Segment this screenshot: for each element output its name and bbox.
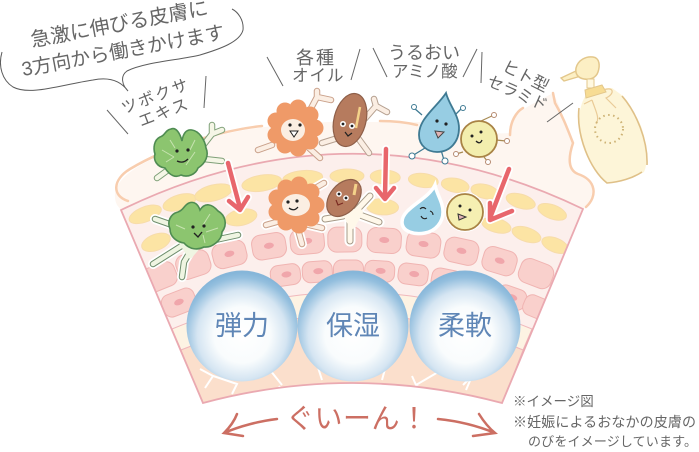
circle: 弾力 xyxy=(186,270,298,382)
upper yellow ceramide character xyxy=(454,112,510,164)
label: ヒト型セラミド xyxy=(484,57,573,122)
arrow: stretch left xyxy=(224,414,277,436)
upper blue amino acid character xyxy=(409,93,466,164)
footnotes: ※妊娠によるおなかの皮膚の xyxy=(513,414,696,430)
label: 各種オイル: 各種 xyxy=(296,48,336,68)
circle: 保湿: 保湿 xyxy=(326,311,380,341)
label: うるおいアミノ酸: うるおい xyxy=(388,43,460,63)
lower brown oil character xyxy=(320,173,379,241)
peach dermis xyxy=(181,315,523,405)
label: 各種オイル xyxy=(267,48,360,86)
red arrow right xyxy=(490,169,512,220)
pump bottle xyxy=(561,57,647,183)
stratum corneum and pump hump xyxy=(115,93,594,210)
pink cells upper row xyxy=(139,227,556,295)
yellow cells upper row xyxy=(127,169,569,227)
red arrow middle xyxy=(376,149,394,199)
circle: 柔軟 xyxy=(410,270,520,382)
dermis cell lines xyxy=(200,368,471,394)
circle: 柔軟: 柔軟 xyxy=(438,311,492,341)
yellow cells lower row xyxy=(139,198,571,257)
lower blue amino acid character xyxy=(402,185,443,234)
cream layer xyxy=(172,292,532,350)
label: ヒト型セラミド: セラミド xyxy=(484,73,550,115)
label: うるおいアミノ酸: アミノ酸 xyxy=(392,62,458,81)
label: ヒト型セラミド: ヒト型 xyxy=(499,57,552,96)
label: ツボクサエキス xyxy=(107,75,206,134)
pink cells lower row xyxy=(159,260,556,323)
lower orange oil character xyxy=(266,176,324,244)
stretch caption: ぐいーん！ xyxy=(286,403,428,434)
speech bubble xyxy=(0,0,243,91)
footnotes xyxy=(513,394,697,449)
skin wedge xyxy=(121,154,583,405)
lower ツボクサ character xyxy=(153,202,238,277)
speech bubble: 3方向から働きかけます xyxy=(20,22,226,81)
label: ツボクサエキス: ツボクサ xyxy=(119,75,193,118)
cell nuclei xyxy=(173,237,518,307)
red arrow left xyxy=(228,163,248,210)
upper orange oil character xyxy=(258,91,331,158)
footnotes: のびをイメージしています。 xyxy=(528,434,697,449)
circle: 弾力: 弾力 xyxy=(215,311,269,341)
label: うるおいアミノ酸 xyxy=(373,43,482,83)
lower yellow ceramide character xyxy=(445,192,485,232)
circle: 保湿 xyxy=(298,270,408,382)
label: ツボクサエキス: エキス xyxy=(136,96,192,131)
footnotes: ※イメージ図 xyxy=(513,394,594,409)
arrow: stretch right xyxy=(438,414,495,436)
upper brown oil character xyxy=(322,90,387,153)
label: 各種オイル: オイル xyxy=(292,67,344,85)
upper ツボクサ character xyxy=(154,125,222,178)
